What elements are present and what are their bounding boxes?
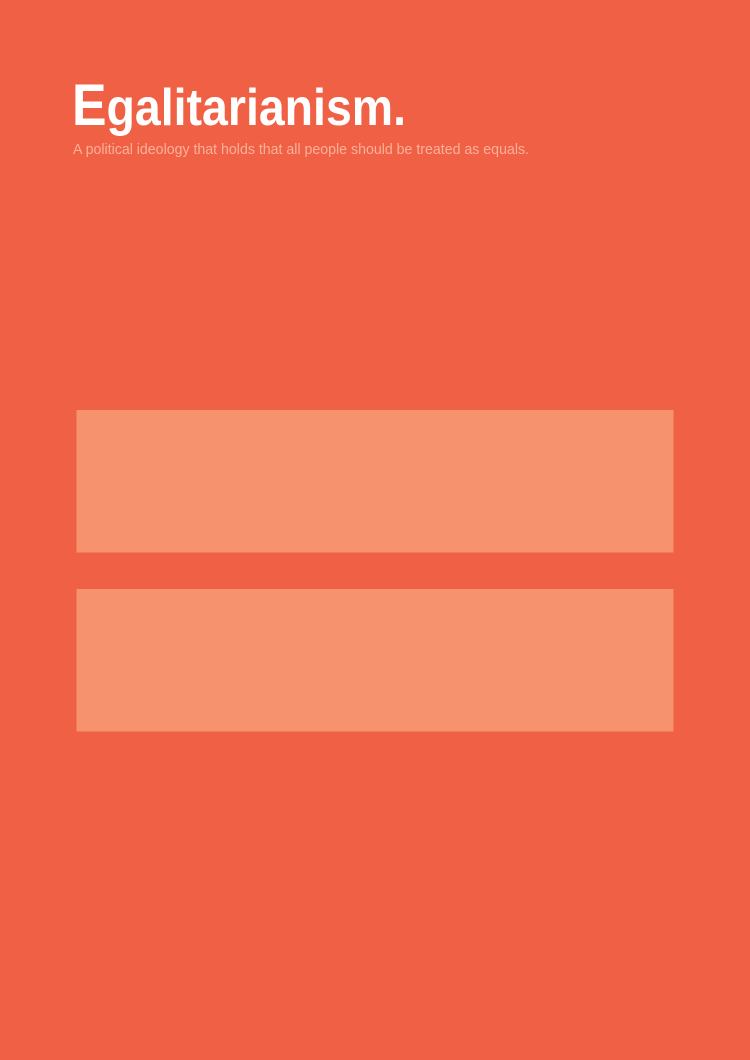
equals sign: [76, 410, 674, 732]
subtitle: A political ideology that holds that all people should be treated as equals.: [73, 142, 529, 158]
title: Egalitarianism.: [72, 73, 406, 138]
top bar: [76, 410, 674, 552]
bottom bar: [76, 589, 674, 732]
